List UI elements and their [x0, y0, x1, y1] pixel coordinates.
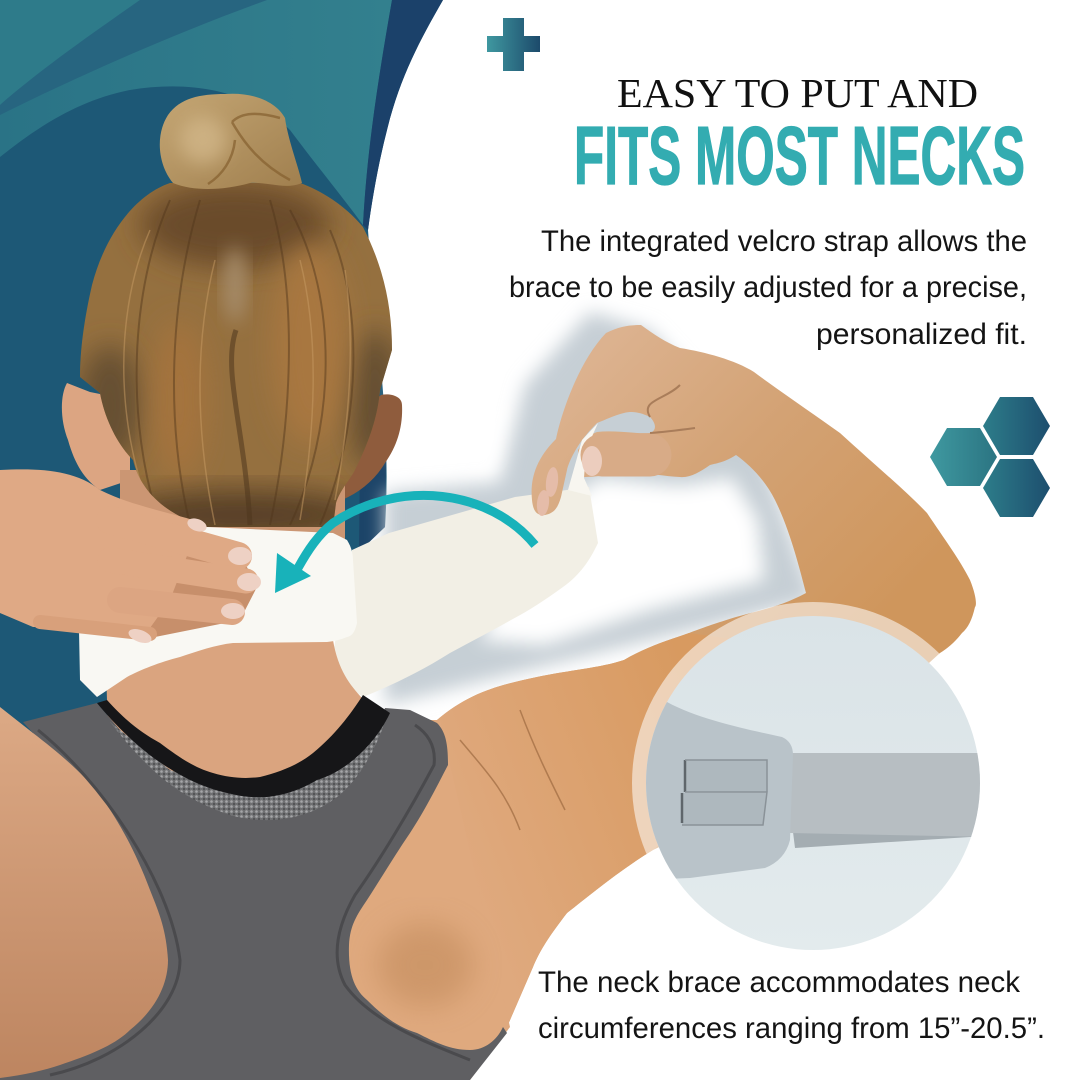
nails [127, 516, 261, 646]
curved arrow [275, 495, 535, 593]
hair [80, 183, 392, 527]
raised arm and hand [437, 325, 976, 1040]
icon: plus [487, 18, 540, 71]
index fingernail [544, 466, 560, 498]
middle fingernail [536, 489, 550, 517]
description text [509, 225, 1027, 351]
upper arm and armpit shading [437, 633, 760, 1040]
wall shadow of the arm [385, 300, 815, 705]
finger one [110, 520, 238, 556]
shirt hem lines [38, 725, 470, 1075]
description text: The integrated velcro strap allows the [541, 225, 1027, 258]
mesh lower band [110, 712, 388, 820]
translucent ring [632, 602, 994, 964]
thumb [40, 622, 150, 634]
heading line 1: EASY TO PUT AND [617, 70, 978, 116]
left back and shoulder skin [0, 707, 220, 1080]
size text [538, 966, 1045, 1045]
bun [160, 94, 302, 189]
ears [62, 383, 402, 540]
description text: personalized fit. [816, 318, 1027, 351]
brace tab pinched by fingers [568, 423, 598, 496]
palm [0, 469, 200, 628]
knuckle creases [648, 385, 695, 433]
description text: brace to be easily adjusted for a precise, [509, 271, 1027, 304]
thumb nail [582, 446, 602, 476]
finger two [110, 560, 246, 581]
tank top [0, 695, 507, 1080]
black bra band [97, 695, 390, 797]
neck brace: front flap [79, 525, 357, 697]
background swoosh [0, 0, 443, 745]
strap shadow [793, 833, 972, 848]
neck [105, 640, 375, 800]
finger three [120, 600, 232, 612]
hand underside shadow [80, 500, 258, 638]
size text: circumferences ranging from 15”-20.5”. [538, 1012, 1045, 1045]
hair and bun [78, 94, 403, 540]
forearm, hand, upper arm [437, 325, 976, 1040]
left hand at neck [0, 469, 261, 646]
thumb [602, 434, 650, 476]
strap [790, 753, 990, 837]
size text: The neck brace accommodates neck [538, 966, 1021, 999]
brace: loose strap [333, 487, 598, 697]
icon: hexagon cluster [930, 397, 1050, 517]
inset circle: strap detail [632, 602, 994, 964]
right back skin [300, 710, 565, 1080]
brace pad [640, 695, 793, 880]
velcro slots [685, 760, 767, 792]
